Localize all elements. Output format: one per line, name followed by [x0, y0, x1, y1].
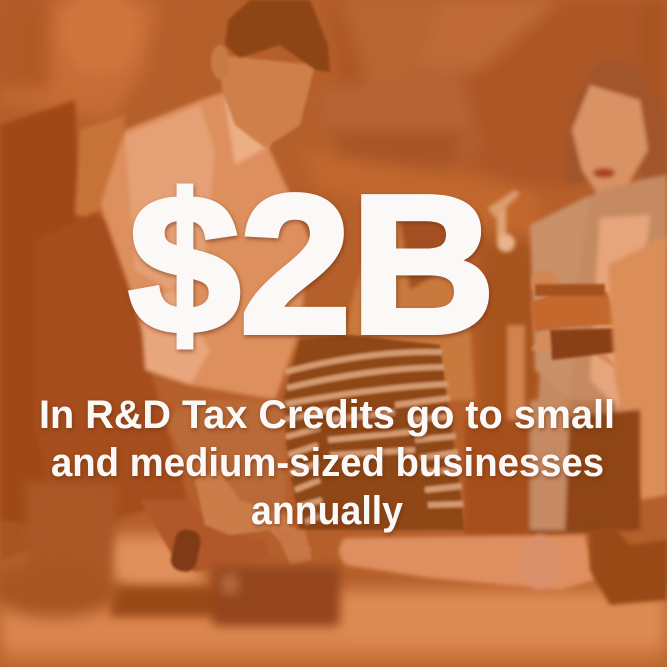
man face and hair — [211, 0, 330, 148]
ceiling and back wall — [300, 0, 667, 440]
right hand — [590, 528, 667, 605]
big figure: $2B: $2B — [129, 155, 495, 374]
arm and hands at centre — [140, 470, 312, 574]
cup on table — [25, 482, 118, 600]
left foreground hand — [0, 562, 120, 618]
dark lower backdrop — [165, 400, 640, 535]
caption text: and medium-sized businesses — [51, 441, 604, 485]
right foreground person — [608, 235, 667, 500]
woman hair and shoulder left — [0, 100, 188, 560]
middle girl hair — [340, 195, 475, 400]
foreground person top left — [0, 0, 160, 120]
caption text — [39, 393, 615, 533]
middle girl striped sweater — [280, 335, 465, 530]
man in white shirt — [100, 88, 310, 400]
dark blurred object — [110, 566, 340, 626]
caption text: In R&D Tax Credits go to small — [39, 393, 615, 437]
rolled paper — [339, 534, 595, 590]
woman on right — [530, 60, 667, 530]
table — [0, 535, 667, 667]
woman hands and notepad — [530, 270, 620, 370]
caption text: annually — [251, 489, 404, 533]
lamp — [488, 190, 525, 425]
